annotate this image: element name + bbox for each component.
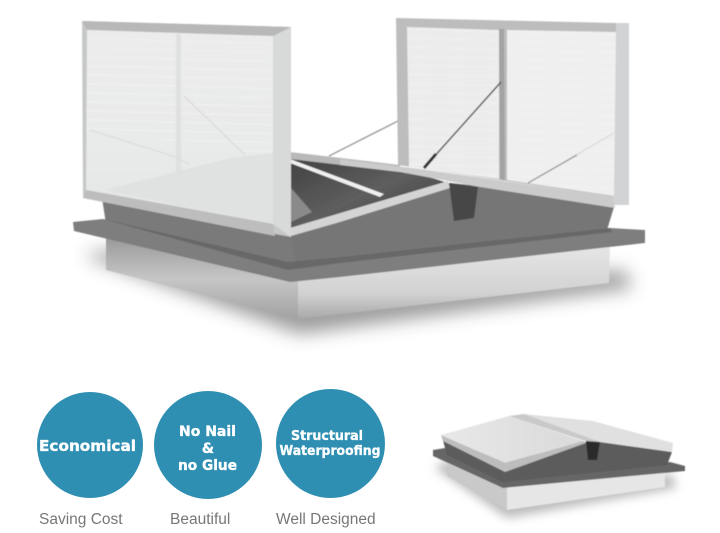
circle [154, 391, 262, 499]
caption: well designed: Well Designed [276, 511, 376, 528]
flange [73, 219, 645, 282]
lid ridge [509, 414, 600, 442]
circle label: & [202, 441, 214, 457]
curb body dark left [102, 198, 296, 265]
ground shadow [84, 250, 632, 334]
gas strut pale [528, 133, 614, 183]
benefit: economical [37, 392, 143, 498]
left lid edge [441, 435, 586, 472]
middle mullion [499, 29, 505, 180]
circle [37, 392, 143, 498]
left leaf [82, 21, 291, 237]
caption: saving cost: Saving Cost [39, 511, 123, 528]
main product: open double-leaf roof hatch [73, 18, 645, 334]
wall left [447, 463, 507, 510]
reflected struts [183, 95, 245, 155]
right lid bottom band [340, 159, 615, 208]
bottom bar [83, 190, 275, 236]
right pane [507, 30, 616, 196]
right lid [524, 414, 673, 452]
upper rim of opening [290, 152, 400, 172]
curb body dark gable [291, 183, 614, 266]
benefit: structural waterproofing [276, 389, 385, 498]
see-through floor reflection [105, 153, 273, 224]
dark notch [586, 441, 600, 460]
shadow [435, 460, 676, 518]
strut to left leaf [329, 121, 398, 156]
curb wall left face [106, 238, 298, 319]
circle label: no Glue [178, 458, 237, 474]
flange inner crease [103, 219, 612, 270]
benefit: no nail and no glue [154, 391, 262, 499]
white rail inside opening [290, 159, 384, 197]
dark body [442, 437, 672, 482]
leaf frame [82, 21, 291, 237]
caption: beautiful: Beautiful [170, 511, 230, 528]
circle label: Economical [39, 437, 136, 455]
front lid edge [290, 181, 450, 236]
leaf frame [396, 18, 629, 205]
circle [276, 389, 385, 498]
left pane [407, 27, 499, 179]
left lid [441, 416, 583, 463]
circle label: Structural [291, 429, 363, 444]
dark notch [449, 183, 478, 221]
glazing [86, 30, 273, 224]
wall right [507, 472, 665, 510]
curb wall right face [298, 245, 610, 319]
circle label: Waterproofing [280, 444, 380, 459]
centre opening interior [290, 154, 448, 230]
flange [433, 448, 685, 488]
mullion reflection [176, 34, 181, 210]
right leaf [396, 18, 629, 205]
leaf side post [273, 27, 291, 237]
small product: closed roof hatch [433, 414, 685, 518]
gas strut dark [424, 82, 501, 168]
leaf side post [613, 23, 629, 205]
deep shadow inside opening [291, 188, 312, 222]
circle label: No Nail [179, 424, 236, 440]
leaf top bar [82, 21, 291, 36]
